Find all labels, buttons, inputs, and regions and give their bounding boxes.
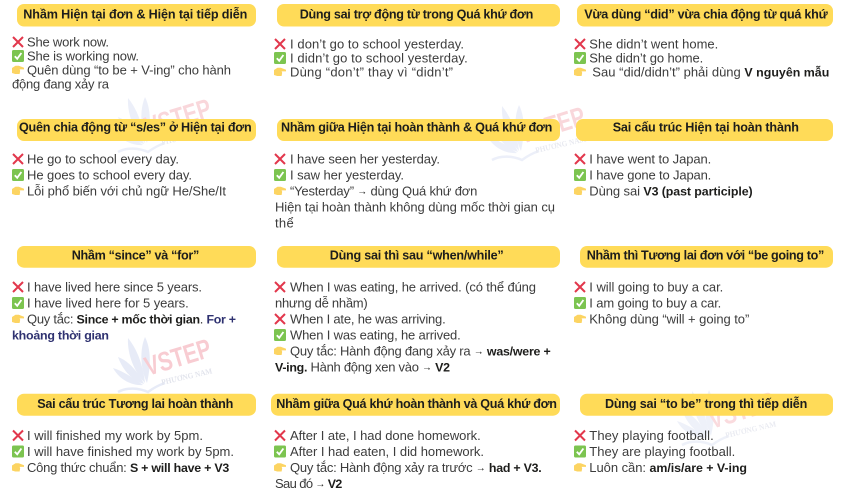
heading bbox=[17, 394, 256, 416]
heading bbox=[577, 4, 833, 26]
panel: present simple vs continuous bbox=[12, 4, 256, 91]
note: Dùng “don’t” thay vì “didn’t” bbox=[290, 64, 453, 79]
heading: Nhầm Hiện tại đơn & Hiện tại tiếp diễn bbox=[23, 7, 247, 22]
correct example: I have lived here for 5 years. bbox=[27, 295, 189, 310]
note: → bbox=[357, 186, 367, 197]
correct example: I will have finished my work by 5pm. bbox=[27, 444, 234, 459]
note bbox=[12, 62, 231, 91]
note: V2 bbox=[435, 360, 450, 374]
heading bbox=[576, 119, 833, 141]
note bbox=[12, 311, 236, 342]
watermark: top right: VSTEP bbox=[515, 101, 589, 150]
note: Sau “did/didn’t” phải dùng V nguyên mẫu bbox=[592, 64, 829, 79]
correct example: They are playing football. bbox=[589, 444, 735, 459]
heading: Dùng sai “to be” trong thì tiếp diễn bbox=[605, 396, 807, 411]
watermark: lower right: PHƯƠNG NAM bbox=[724, 419, 778, 440]
note: Luôn cần: am/is/are + V-ing bbox=[589, 460, 747, 475]
note bbox=[274, 459, 542, 491]
heading bbox=[277, 4, 560, 26]
heading bbox=[17, 4, 256, 26]
heading bbox=[580, 246, 833, 268]
note: “Yesterday” bbox=[290, 183, 354, 198]
correct example: I saw her yesterday. bbox=[290, 167, 404, 182]
note bbox=[274, 183, 555, 230]
note: khoảng thời gian bbox=[12, 328, 109, 342]
panel: did plus past verb bbox=[574, 4, 833, 79]
correct example: I didn’t go to school yesterday. bbox=[290, 50, 468, 65]
wrong example: I have went to Japan. bbox=[589, 151, 711, 166]
heading: Nhầm giữa Quá khứ hoàn thành và Quá khứ đơn bbox=[276, 397, 557, 411]
note: Công thức chuẩn: S + will have + V3 bbox=[27, 460, 229, 475]
note: V2 bbox=[328, 477, 342, 491]
correct example: I am going to buy a car. bbox=[589, 295, 721, 310]
wrong example: They playing football. bbox=[589, 428, 714, 443]
heading: Sai cấu trúc Hiện tại hoàn thành bbox=[613, 121, 799, 135]
heading: Dùng sai trợ động từ trong Quá khứ đơn bbox=[300, 8, 533, 22]
panel: past perfect vs past simple bbox=[271, 394, 560, 491]
heading: Nhầm thì Tương lai đơn với “be going to” bbox=[587, 249, 824, 263]
panel: future simple vs be going to bbox=[574, 246, 833, 326]
note: Quy tắc: Hành động đang xảy ra bbox=[290, 343, 471, 358]
watermark: lower left: VSTEP bbox=[141, 333, 215, 382]
note: → bbox=[315, 479, 325, 490]
wrong example two: When I ate, he was arriving. bbox=[290, 311, 446, 326]
watermark: top left: VSTEP bbox=[141, 93, 215, 142]
note: Quy tắc: Hành động xảy ra trước bbox=[290, 460, 473, 475]
wrong example one bbox=[275, 279, 536, 310]
heading: Nhầm “since” và “for” bbox=[72, 249, 199, 263]
correct example: When I was eating, he arrived. bbox=[290, 327, 461, 342]
wrong example: I have lived here since 5 years. bbox=[27, 279, 202, 294]
note: Quên dùng “to be + V-ing” cho hành bbox=[27, 62, 231, 77]
panel: since and for bbox=[12, 246, 256, 342]
note: had + V3. bbox=[489, 461, 542, 475]
panel: auxiliary in past simple bbox=[274, 4, 560, 79]
wrong example: I will going to buy a car. bbox=[589, 279, 723, 294]
watermark: top left bbox=[113, 93, 215, 152]
note: Không dùng “will + going to” bbox=[589, 311, 749, 326]
note: → bbox=[422, 362, 432, 373]
wrong example: I don’t go to school yesterday. bbox=[290, 36, 464, 51]
note: → bbox=[476, 463, 486, 474]
note: Lỗi phổ biến với chủ ngữ He/She/It bbox=[27, 183, 226, 198]
heading bbox=[17, 246, 256, 268]
heading bbox=[271, 394, 560, 416]
note: was/were + bbox=[486, 344, 551, 358]
panel: present perfect vs past simple bbox=[274, 119, 560, 230]
heading: Sai cấu trúc Tương lai hoàn thành bbox=[37, 397, 233, 411]
note: thể bbox=[275, 215, 294, 230]
correct example: She is working now. bbox=[27, 48, 139, 63]
watermark: lower right bbox=[677, 386, 779, 445]
panel: future perfect structure bbox=[12, 394, 256, 475]
wrong example: I have seen her yesterday. bbox=[290, 151, 440, 166]
note: dùng Quá khứ đơn bbox=[367, 183, 477, 198]
watermark: top left: PHƯƠNG NAM bbox=[160, 126, 214, 147]
heading bbox=[17, 119, 256, 141]
heading: Quên chia động từ “s/es” ở Hiện tại đơn bbox=[19, 121, 252, 135]
wrong example: He go to school every day. bbox=[27, 151, 179, 166]
note: Hiện tại hoàn thành không dùng mốc thời gian cụ bbox=[275, 199, 555, 214]
watermark: lower right: VSTEP bbox=[705, 386, 779, 435]
note: → bbox=[474, 346, 484, 357]
correct example: He goes to school every day. bbox=[27, 167, 192, 182]
heading: Dùng sai thì sau “when/while” bbox=[330, 249, 504, 263]
watermark: lower left bbox=[113, 333, 215, 392]
wrong example: After I ate, I had done homework. bbox=[290, 428, 481, 443]
heading bbox=[580, 394, 833, 416]
panel: present perfect structure bbox=[574, 119, 833, 198]
note bbox=[274, 342, 551, 374]
panel: when and while bbox=[274, 246, 560, 374]
heading bbox=[277, 246, 560, 268]
wrong example: I will finished my work by 5pm. bbox=[27, 428, 203, 443]
watermark: top right bbox=[487, 101, 589, 160]
panel: s/es in present simple bbox=[12, 119, 256, 198]
note: V-ing. Hành động xen vào bbox=[275, 359, 419, 374]
note: Dùng sai V3 (past participle) bbox=[589, 183, 753, 198]
note: Sau đó bbox=[275, 476, 313, 491]
correct example: After I had eaten, I did homework. bbox=[290, 444, 484, 459]
note: Quy tắc: Since + mốc thời gian. For + bbox=[27, 311, 236, 326]
wrong example one: nhưng dễ nhầm) bbox=[275, 295, 368, 310]
heading bbox=[277, 119, 560, 141]
heading: Vừa dùng “did” vừa chia động từ quá khứ bbox=[584, 8, 829, 22]
correct example: She didn’t go home. bbox=[589, 50, 703, 65]
correct example: I have gone to Japan. bbox=[589, 167, 711, 182]
watermark: lower left: PHƯƠNG NAM bbox=[160, 366, 214, 387]
note: động đang xảy ra bbox=[12, 76, 110, 91]
wrong example: She didn’t went home. bbox=[589, 36, 718, 51]
heading: Nhầm giữa Hiện tại hoàn thành & Quá khứ đơn bbox=[281, 121, 552, 135]
wrong example one: When I was eating, he arrived. (có thể đúng bbox=[290, 279, 536, 294]
watermark: top right: PHƯƠNG NAM bbox=[534, 134, 588, 155]
wrong example: She work now. bbox=[27, 34, 109, 49]
panel: to be in continuous tenses bbox=[574, 394, 833, 475]
